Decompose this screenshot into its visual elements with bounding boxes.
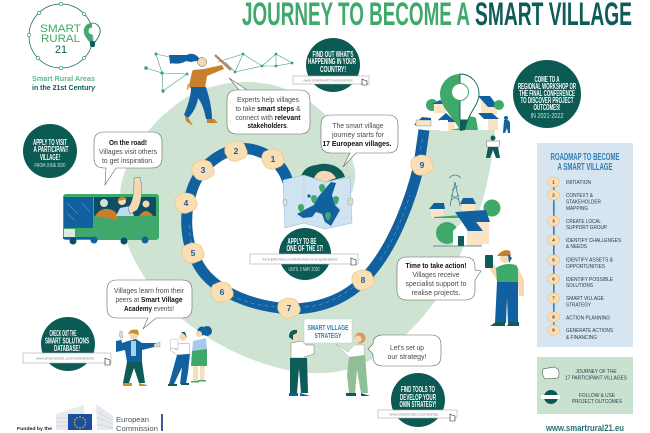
- step 7: [278, 298, 300, 318]
- roadmap timeline: 3: [552, 219, 555, 224]
- bus with villagers: [63, 177, 159, 244]
- step 8: 8: [361, 275, 366, 285]
- bubble: time to take action: Time to take action!: [406, 261, 466, 270]
- legend text: FOLLOW & USE: [579, 393, 615, 399]
- roadmap timeline: 9: [552, 328, 555, 333]
- journey road: numbered path: [175, 130, 433, 318]
- bubble: experts: Experts help villages: [237, 95, 299, 104]
- roadmap steps text: IDENTIFY POSSIBLE: [566, 277, 613, 283]
- bubble: time to take action: specialist support to: [406, 279, 466, 288]
- bubble: villages learn from peers: [107, 280, 192, 329]
- funded by the European Commission: Funded by the: [17, 426, 52, 432]
- callout: check out the database: SMART SOLUTIONS: [45, 336, 89, 346]
- logo: Smart Rural 21: 21: [55, 44, 67, 56]
- callout: find out what's happening: COUNTRY!: [320, 65, 346, 74]
- logo: Smart Rural 21: Smart Rural Areas: [32, 74, 95, 83]
- callout: find out what's happening: www.smartrural21.eu/countries: [303, 78, 353, 82]
- roadmap steps text: IDENTIFY ASSETS &: [566, 258, 613, 264]
- step 5: 5: [191, 248, 196, 258]
- bubble: experts: to take smart steps &: [236, 104, 300, 113]
- funded by the European Commission: Commission: [116, 424, 158, 433]
- roadmap steps text: INITIATION: [566, 180, 591, 186]
- step 4: [175, 193, 197, 213]
- character: expert woman with pen: [169, 54, 231, 126]
- callout: apply to be one of the 17: APPLY TO BE: [288, 237, 317, 246]
- callout: apply to visit: APPLY TO VISIT: [33, 138, 67, 147]
- logo: Smart Rural 21: in the 21st Century: [32, 83, 96, 92]
- callout: come to a regional workshop: COME TO A: [534, 75, 560, 84]
- man teaching: [116, 330, 160, 386]
- bubble: let's set up our strategy: Let's set up: [390, 343, 424, 352]
- network of connections: [144, 52, 293, 93]
- legend icon: circle with link: [541, 390, 560, 404]
- step 1: 1: [271, 154, 276, 164]
- bubble: let's set up our strategy: our strategy!: [388, 352, 426, 361]
- bubble: time to take action: [397, 257, 481, 300]
- callout: check out the database: [23, 317, 111, 371]
- people holding strategy sign: [289, 319, 370, 396]
- bubble: on the road: to get inspiration.: [102, 156, 154, 165]
- roadmap steps text: SMART VILLAGE: [566, 296, 604, 302]
- website url: www.smartrural21.eu: [545, 423, 624, 433]
- callout: find tools: [378, 373, 457, 427]
- roadmap steps text: SOLUTIONS: [566, 283, 593, 289]
- roadmap steps text: CREATE LOCAL: [566, 219, 601, 225]
- roadmap timeline: 6: [552, 277, 555, 282]
- step 9: 9: [420, 160, 425, 170]
- step 5: [182, 243, 204, 263]
- farmer with phone: [485, 250, 524, 326]
- step 6: 6: [220, 287, 225, 297]
- callout: apply to visit: FROM JUNE 2020: [34, 163, 66, 169]
- step 8: [352, 270, 374, 290]
- bubble: time to take action: Villages receive: [412, 270, 460, 279]
- step 6: [211, 282, 233, 302]
- callout: check out the database: www.smartrural21.eu/smartsolutions: [36, 356, 94, 360]
- roadmap steps text: SUPPORT GROUP: [566, 225, 607, 231]
- callout: apply to be one of the 17: [250, 228, 358, 280]
- funded by the European Commission: [17, 404, 163, 433]
- roadmap steps text: CONTEXT &: [566, 193, 593, 199]
- logo: Smart Rural 21: RURAL: [41, 33, 80, 45]
- step 2: [225, 141, 247, 161]
- callout: apply to visit: A PARTICIPANT: [34, 145, 69, 154]
- legend text: 17 PARTICIPANT VILLAGES: [565, 376, 627, 382]
- callout: find out what's happening: FIND OUT WHAT'S: [312, 50, 354, 59]
- callout: find out what's happening: [293, 38, 369, 92]
- callout: apply to be one of the 17: ONE OF THE 17!: [286, 244, 324, 253]
- callout: find out what's happening: HAPPENING IN YOUR: [308, 57, 356, 66]
- callout: find tools: www.smartrural21.eu/roadmap: [390, 412, 438, 416]
- map of Europe with person behind: [283, 164, 353, 229]
- bubble: experts: connect with relevant: [236, 113, 301, 122]
- bubble: the smart village journey starts: The smart village: [332, 121, 384, 130]
- bubble: on the road: Villages visit others: [99, 147, 157, 156]
- roadmap timeline: 1: [552, 180, 555, 185]
- callout: find tools: DEVELOP YOUR: [400, 393, 436, 402]
- callout: come to a regional workshop: [513, 60, 581, 128]
- callout: apply to be one of the 17: UNTIL 5 MAY 2020: [288, 267, 320, 273]
- callout: come to a regional workshop: TO DISCOVER PROJECT: [520, 96, 574, 105]
- green journey background: [120, 82, 495, 373]
- bubble: the smart village journey starts: [321, 115, 398, 167]
- bubble: on the road: [94, 132, 162, 185]
- roadmap timeline: 4: [552, 238, 555, 243]
- callout: apply to visit: VILLAGE!: [40, 153, 60, 162]
- panel: roadmap to become a smart village: [537, 143, 633, 347]
- person with hands on hips: [486, 136, 500, 158]
- roadmap heading: [550, 151, 620, 173]
- step 3: [192, 160, 214, 180]
- roadmap steps text: OPPORTUNITIES: [566, 264, 605, 270]
- roadmap steps text: IDENTIFY CHALLENGES: [566, 238, 621, 244]
- bubble: villages learn from peers: Villages learn from their: [114, 286, 184, 295]
- bubble: time to take action: realise projects.: [412, 288, 460, 297]
- pin with top village: [414, 74, 510, 133]
- step 3: 3: [201, 165, 206, 175]
- legend icon: pebble: [542, 367, 559, 379]
- roadmap steps text: [566, 180, 621, 341]
- step 7: 7: [287, 303, 292, 313]
- roadmap timeline: [548, 177, 560, 335]
- step 4: 4: [184, 198, 189, 208]
- legend text: PROJECT OUTCOMES: [572, 399, 622, 405]
- logo: Smart Rural 21: [27, 2, 100, 92]
- step 2: 2: [234, 146, 239, 156]
- roadmap steps text: & NEEDS: [566, 244, 587, 250]
- legend text: [565, 369, 627, 405]
- callout: find tools: FIND TOOLS TO: [401, 385, 435, 394]
- roadmap steps text: STRATEGY: [566, 302, 591, 308]
- step 9: [411, 155, 433, 175]
- callout: apply to visit: [23, 124, 77, 178]
- roadmap steps text: MAPPING: [566, 206, 588, 212]
- callout: check out the database: CHECK OUT THE: [50, 329, 77, 338]
- roadmap timeline: 8: [552, 315, 555, 320]
- people holding strategy sign: STRATEGY: [314, 331, 342, 340]
- callout: come to a regional workshop: REGIONAL WORKSHOP OR: [518, 82, 576, 91]
- step 1: [262, 149, 284, 169]
- callout: find tools: OWN STRATEGY!: [400, 400, 436, 409]
- roadmap steps text: & FINANCING: [566, 335, 597, 341]
- bubble: the smart village journey starts: journey starts for: [331, 130, 384, 139]
- bubble: villages learn from peers: peers at Smart Village: [116, 295, 182, 304]
- roadmap timeline: 5: [552, 258, 555, 263]
- roadmap timeline: 2: [552, 193, 555, 198]
- panel: legend: [537, 357, 633, 414]
- bubble: villages learn from peers: Academy events!: [124, 304, 174, 313]
- middle village with tower: [429, 175, 500, 246]
- people holding strategy sign: SMART VILLAGE: [308, 323, 348, 332]
- legend text: JOURNEY OF THE: [576, 369, 617, 375]
- two women with paper: [168, 326, 212, 386]
- roadmap steps text: GENERATE ACTIONS: [566, 328, 613, 334]
- callout: come to a regional workshop: IN 2021-2022: [530, 113, 564, 120]
- callout: check out the database: DATABASE!: [54, 344, 80, 353]
- callout: come to a regional workshop: THE FINAL CONFERENCE: [519, 89, 575, 98]
- callout: apply to be one of the 17: form.jotformeu.com/EASmart-rural-applications: [263, 258, 338, 262]
- bubble: the smart village journey starts: 17 European villages.: [322, 139, 392, 148]
- roadmap steps text: STAKEHOLDER: [566, 200, 601, 206]
- bubble: experts: stakeholders.: [248, 121, 288, 130]
- bubble: let's set up our strategy: [368, 335, 441, 366]
- bubble: on the road: On the road!: [109, 138, 147, 147]
- logo: Smart Rural 21: SMART: [40, 23, 81, 35]
- roadmap timeline: 7: [552, 296, 555, 301]
- callout: come to a regional workshop: OUTCOMES!: [534, 103, 560, 112]
- bubble: experts: [227, 78, 310, 134]
- roadmap steps text: ACTION PLANNING: [566, 316, 610, 322]
- funded by the European Commission: European: [116, 415, 149, 424]
